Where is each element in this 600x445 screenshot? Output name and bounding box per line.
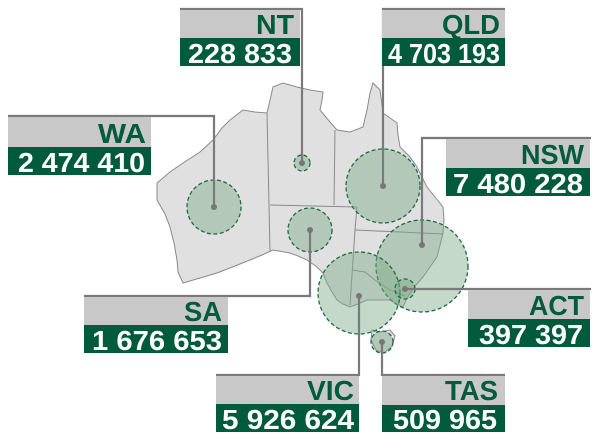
label: WA: 2 474 410 <box>18 147 145 178</box>
label: NT <box>180 9 300 69</box>
map: Australia <box>157 83 444 353</box>
label: VIC: VIC <box>307 375 354 406</box>
label: ACT <box>468 290 590 350</box>
circles <box>187 149 468 353</box>
label: QLD <box>382 9 505 69</box>
label: SA <box>84 296 228 356</box>
label: SA: 1 676 653 <box>92 325 222 356</box>
state borders <box>267 113 443 305</box>
label: TAS: 509 965 <box>393 404 497 435</box>
label: NSW: 7 480 228 <box>453 168 583 199</box>
circle: VIC <box>318 252 400 334</box>
label: SA: SA <box>184 296 222 327</box>
label: ACT: ACT <box>529 290 584 321</box>
circle: WA <box>187 180 241 234</box>
label: QLD: 4 703 193 <box>388 38 500 69</box>
label: QLD: QLD <box>442 9 500 40</box>
label: TAS: TAS <box>445 375 498 406</box>
leader lines <box>8 9 591 375</box>
dots <box>211 160 425 345</box>
label: TAS <box>382 375 505 435</box>
circle: SA <box>288 208 332 252</box>
circle: ACT <box>395 279 415 299</box>
label: NSW <box>446 139 590 199</box>
map: Tasmania <box>371 330 395 353</box>
label: NT: 228 833 <box>188 38 292 69</box>
circle: TAS <box>371 331 393 353</box>
label: WA: WA <box>98 118 146 149</box>
label: NT: NT <box>256 9 294 40</box>
label: VIC <box>216 375 359 435</box>
label: NSW: NSW <box>521 139 585 170</box>
circle: NSW <box>376 220 468 312</box>
circle: NT <box>294 155 310 171</box>
label: VIC: 5 926 624 <box>222 404 354 435</box>
label: ACT: 397 397 <box>479 319 583 350</box>
label: WA <box>8 117 151 178</box>
circle: QLD <box>346 149 420 223</box>
